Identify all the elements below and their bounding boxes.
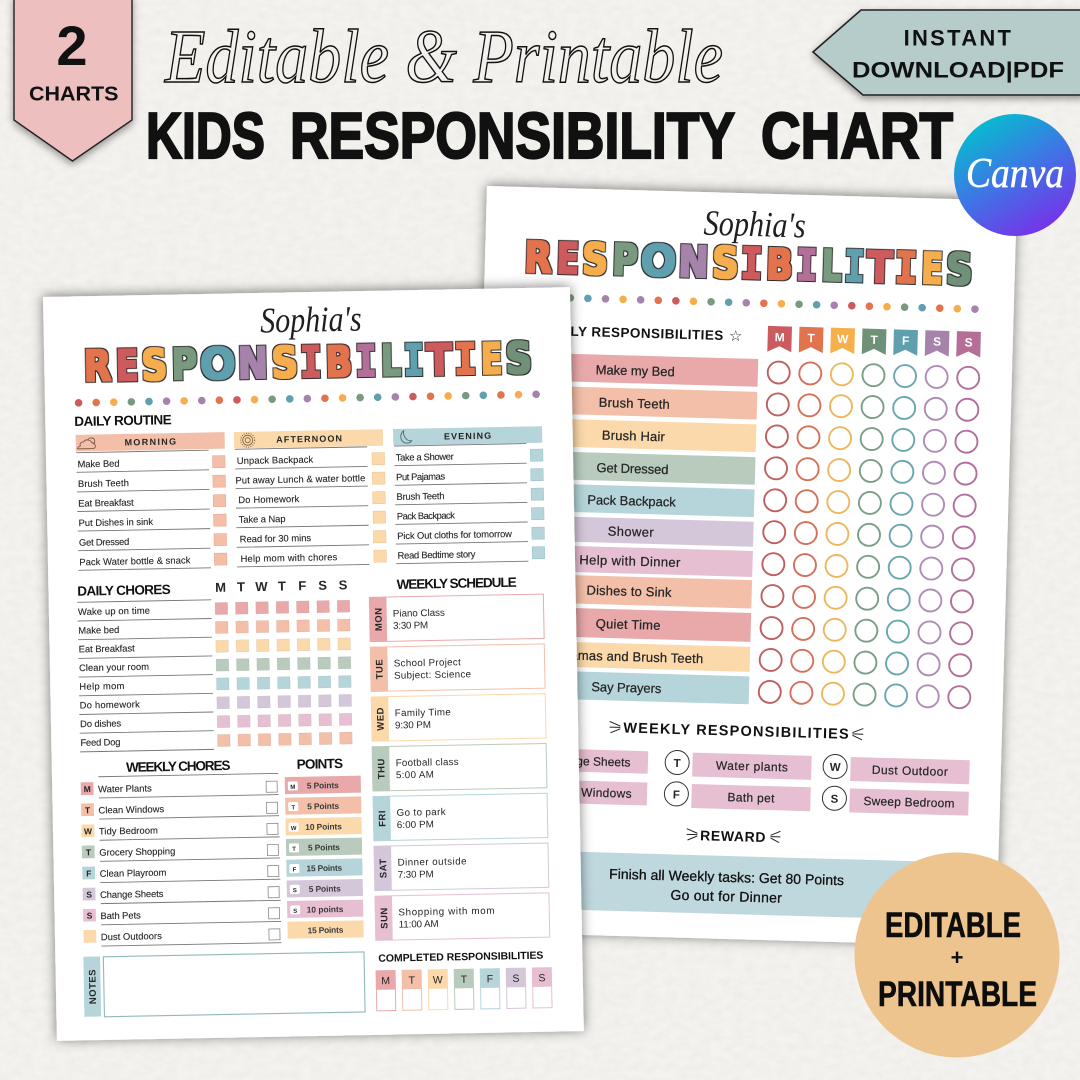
- task bars: Pack Backpack: [587, 492, 677, 510]
- column: morning: Put Dishes in sink: [79, 516, 153, 528]
- column: evening: Pack Backpack: [397, 509, 455, 522]
- weekly chores list: Tidy Bedroom: [99, 824, 158, 837]
- daily chores list: Feed Dog: [80, 736, 121, 748]
- day letters row: T: [237, 579, 245, 594]
- points bars: 15 Points: [306, 863, 343, 873]
- daily chores list: Clean your room: [79, 661, 149, 673]
- heading: daily responsibilities: DAILY RESPONSIBILITIES: [546, 323, 724, 343]
- weekly chores list: T: [85, 805, 91, 815]
- day letters row: S: [318, 578, 327, 593]
- heading: completed responsibilities: COMPLETED RESPONSIBILITIES: [378, 950, 544, 965]
- title: Responsibilities: S: [945, 245, 973, 296]
- weekly task tags: T: [673, 758, 681, 770]
- title: Responsibilities: I: [894, 244, 918, 294]
- daily chores list: Make bed: [78, 624, 119, 636]
- badge: editable + printable: EDITABLE: [885, 906, 1021, 945]
- badge: editable + printable: +: [951, 945, 963, 970]
- daily chores list: Wake up on time: [78, 605, 150, 617]
- title: Responsibilities: N: [678, 238, 709, 288]
- reward banner: Go out for Dinner: [670, 887, 782, 906]
- badge: instant download pdf: INSTANT: [904, 26, 1012, 51]
- title: Responsibilities: S: [505, 334, 533, 385]
- weekly schedule: 5:00 AM: [396, 770, 434, 781]
- weekly chores list: Change Sheets: [100, 888, 164, 900]
- points bars: W: [291, 826, 297, 832]
- panel: back chart sheet: [466, 186, 1017, 947]
- reward banner: Finish all Weekly tasks: Get 80 Points: [609, 866, 844, 888]
- day letters row: F: [298, 578, 306, 593]
- name: Sophia's: Sophia's: [703, 203, 806, 246]
- weekly schedule: TUE: [374, 659, 386, 679]
- column: morning: Pack Water bottle & snack: [79, 554, 191, 567]
- day flags: F: [902, 334, 910, 348]
- weekly schedule: Football class: [396, 757, 459, 769]
- reward banner: [507, 850, 968, 921]
- day flags: [767, 326, 981, 358]
- title: Responsibilities: I: [740, 239, 763, 290]
- icon: cloud and sun: [77, 438, 95, 449]
- title: Responsibilities: N: [237, 339, 268, 390]
- title: Responsibilities: I: [403, 336, 424, 386]
- title: Responsibilities: S: [271, 338, 299, 389]
- column: afternoon: AFTERNOON: [276, 433, 342, 445]
- weekly schedule: Subject: Science: [394, 669, 472, 682]
- completed responsibilities boxes: T: [461, 974, 468, 986]
- points bars: M: [290, 785, 295, 791]
- name: Sophia's: Sophia's: [260, 299, 362, 340]
- column: morning: MORNING: [124, 437, 176, 448]
- heading: daily chores: DAILY CHORES: [77, 582, 171, 599]
- title: Responsibilities: T: [426, 336, 453, 386]
- title: Responsibilities: L: [821, 242, 842, 292]
- icon: moon: [401, 431, 412, 443]
- weekly chores list: M: [84, 784, 91, 794]
- task bars: Brush Hair: [602, 428, 666, 444]
- points bars: 5 Points: [307, 780, 339, 791]
- weekly task tags: Clean Windows: [544, 784, 632, 801]
- title: Responsibilities: I: [454, 335, 477, 386]
- daily chores list: Help mom: [79, 680, 125, 692]
- task bars: [513, 352, 758, 704]
- column: afternoon: Unpack Backpack: [237, 454, 314, 466]
- task bars: Brush Teeth: [599, 395, 670, 412]
- weekly schedule: [369, 594, 550, 940]
- title: Responsibilities: [83, 334, 533, 392]
- column: afternoon: Do Homework: [238, 493, 300, 505]
- badge: 2 charts ribbon: 2: [56, 14, 88, 77]
- completed responsibilities boxes: S: [538, 972, 546, 984]
- heading: reward: [687, 827, 780, 845]
- weekly schedule: SUN: [379, 907, 390, 929]
- badge: editable + printable: [854, 852, 1060, 1058]
- title: Responsibilities: S: [581, 235, 609, 286]
- title: Responsibilities: R: [524, 233, 553, 284]
- dotted garland: [75, 390, 540, 407]
- weekly chores list: Clean Windows: [98, 803, 165, 815]
- completed responsibilities boxes: T: [408, 975, 416, 987]
- panel: front chart sheet: [43, 287, 584, 1041]
- title: Responsibilities: I: [300, 338, 322, 388]
- points bars: 10 Points: [305, 821, 342, 832]
- column: morning: Brush Teeth: [78, 477, 129, 489]
- weekly task tags: Change Sheets: [547, 753, 631, 770]
- completed responsibilities boxes: S: [512, 973, 520, 985]
- task bars: Shower: [608, 524, 655, 540]
- day letters row: S: [339, 577, 348, 593]
- column: evening: EVENING: [444, 431, 491, 442]
- day flags: S: [964, 335, 973, 350]
- weekly schedule: MON: [373, 607, 385, 631]
- column: morning: Make Bed: [77, 458, 120, 469]
- title: Responsibilities: E: [115, 341, 139, 392]
- weekly task tags: W: [829, 762, 841, 774]
- column: morning: [76, 432, 227, 570]
- weekly schedule: 3:30 PM: [393, 620, 428, 632]
- notes box: NOTES: [87, 969, 99, 1004]
- task bars: Make my Bed: [596, 362, 675, 379]
- column: afternoon: Help mom with chores: [240, 551, 338, 564]
- daily chores list: Eat Breakfast: [79, 642, 135, 654]
- dotted garland: [514, 292, 979, 313]
- points bars: 5 Points: [308, 842, 340, 853]
- title: Responsibilities: T: [866, 243, 894, 294]
- day flags: M: [774, 330, 785, 344]
- badge: editable + printable: PRINTABLE: [878, 975, 1037, 1014]
- column: evening: Take a Shower: [396, 451, 454, 463]
- title: Responsibilities: I: [355, 337, 377, 387]
- weekly schedule: SAT: [378, 858, 390, 878]
- title: Responsibilities: E: [556, 234, 580, 285]
- weekly task tags: S: [830, 794, 839, 806]
- weekly schedule: THU: [376, 758, 388, 779]
- points bars: [285, 776, 364, 939]
- points bars: 5 Points: [307, 801, 340, 811]
- title: Kids Responsibility Chart: KIDS: [146, 99, 265, 172]
- weekly schedule: Go to park: [397, 807, 446, 819]
- title: Responsibilities: O: [200, 340, 236, 390]
- title: Responsibilities: L: [381, 337, 401, 387]
- title: Responsibilities: B: [766, 240, 793, 291]
- column: afternoon: [234, 429, 386, 567]
- column: morning: Get Dressed: [79, 536, 129, 548]
- daily chores list: [77, 600, 214, 752]
- title: Responsibilities: E: [921, 244, 943, 295]
- icon: sun: [241, 433, 255, 447]
- tracking circles grid: [758, 361, 980, 708]
- heading: weekly chores: WEEKLY CHORES: [126, 758, 231, 775]
- notes box: [83, 952, 365, 1017]
- completed responsibilities boxes: [376, 968, 552, 1011]
- task bars: Say Prayers: [591, 679, 662, 696]
- points bars: T: [292, 847, 296, 853]
- weekly task tags: Sweep Bedroom: [863, 794, 955, 810]
- day flags: S: [933, 335, 941, 349]
- title: Responsibilities: P: [612, 236, 638, 286]
- weekly chores list: S: [87, 911, 93, 921]
- title: Responsibilities: S: [712, 239, 739, 289]
- day letters row: M: [215, 580, 226, 595]
- heading: reward: REWARD: [700, 827, 766, 845]
- weekly chores list: Grocery Shopping: [99, 845, 175, 858]
- title: Responsibilities: E: [480, 335, 503, 385]
- heading: weekly schedule: WEEKLY SCHEDULE: [396, 575, 517, 592]
- title: Responsibilities: B: [325, 337, 353, 388]
- weekly task tags: [528, 746, 970, 816]
- column: afternoon: Put away Lunch & water bottle: [235, 472, 365, 486]
- weekly task tags: F: [673, 789, 680, 802]
- points bars: S: [293, 888, 297, 894]
- task bars: Quiet Time: [596, 616, 661, 633]
- column: afternoon: Take a Nap: [239, 513, 286, 525]
- completed responsibilities boxes: M: [381, 975, 390, 987]
- weekly chores list: [81, 773, 281, 946]
- title: Kids Responsibility Chart: RESPONSIBILITY: [290, 99, 735, 172]
- column: evening: Pick Out cloths for tomorrow: [397, 528, 512, 541]
- completed responsibilities boxes: W: [433, 974, 443, 986]
- weekly schedule: FRI: [377, 810, 389, 827]
- title: Responsibilities: P: [171, 340, 197, 391]
- daily chores list: Do dishes: [80, 717, 121, 729]
- title: Responsibilities: [524, 233, 973, 296]
- day flags: T: [870, 333, 879, 347]
- points bars: 15 Points: [308, 925, 344, 935]
- heading: weekly responsibilities: WEEKLY RESPONSIBILITIES: [623, 721, 850, 743]
- weekly schedule: Piano Class: [393, 608, 445, 620]
- weekly task tags: Bath pet: [727, 790, 775, 805]
- title: Responsibilities: I: [796, 241, 818, 291]
- title: Responsibilities: R: [83, 342, 112, 392]
- weekly schedule: 7:30 PM: [398, 869, 434, 881]
- badge: 2 charts ribbon: [14, 0, 132, 161]
- weekly chores list: T: [86, 847, 92, 857]
- points bars: 5 Points: [309, 883, 341, 894]
- task bars: Dishes to Sink: [586, 583, 672, 600]
- weekly task tags: Water plants: [716, 758, 788, 774]
- column: evening: Put Pajamas: [396, 470, 446, 482]
- badge: instant download pdf: [813, 10, 1080, 95]
- weekly chores list: Clean Playroom: [100, 867, 167, 879]
- heading: points: POINTS: [297, 756, 344, 772]
- column: afternoon: Read for 30 mins: [240, 532, 311, 544]
- task bars: Get Dressed: [596, 460, 669, 477]
- weekly schedule: Dinner outside: [397, 856, 467, 869]
- task bars: Help with Dinner: [579, 552, 681, 570]
- weekly schedule: 9:30 PM: [395, 720, 431, 732]
- points bars: S: [293, 909, 297, 915]
- weekly schedule: Family Time: [395, 707, 451, 719]
- weekly chores list: Bath Pets: [100, 909, 141, 921]
- weekly chores list: Water Plants: [98, 782, 152, 794]
- day letters row: [215, 577, 348, 595]
- badge: Canva logo: [954, 114, 1076, 236]
- heading: daily routine: DAILY ROUTINE: [74, 412, 172, 429]
- column: evening: [393, 426, 545, 564]
- badge: Canva logo: Canva: [966, 151, 1064, 197]
- badge: 2 charts ribbon: CHARTS: [29, 83, 118, 106]
- column: evening: Read Bedtime story: [397, 548, 476, 561]
- task bars: Pajamas and Brush Teeth: [551, 647, 703, 666]
- title: Kids Responsibility Chart: CHART: [761, 99, 953, 172]
- weekly chores list: S: [86, 889, 92, 900]
- title: Responsibilities: O: [640, 237, 677, 288]
- weekly schedule: 11:00 AM: [399, 919, 439, 931]
- day letters row: T: [278, 579, 286, 594]
- column: morning: Eat Breakfast: [78, 497, 134, 509]
- title: Responsibilities: S: [141, 341, 168, 391]
- points bars: 10 points: [307, 904, 344, 915]
- points bars: T: [291, 805, 296, 812]
- weekly schedule: WED: [375, 707, 387, 731]
- points bars: F: [293, 867, 297, 874]
- weekly schedule: School Project: [394, 657, 461, 670]
- weekly chores list: Dust Outdoors: [101, 930, 162, 942]
- column: evening: Brush Teeth: [396, 490, 445, 502]
- weekly schedule: 6:00 PM: [397, 819, 434, 831]
- weekly chores list: F: [86, 868, 91, 878]
- completed responsibilities boxes: F: [487, 973, 493, 985]
- badge: instant download pdf: DOWNLOAD|PDF: [852, 57, 1064, 82]
- weekly task tags: Dust Outdoor: [872, 763, 948, 779]
- title: Responsibilities: I: [844, 242, 865, 293]
- day flags: W: [837, 332, 849, 346]
- daily chores checkbox grid: [215, 600, 352, 747]
- title: Kids Responsibility Chart: [146, 99, 953, 172]
- weekly schedule: Shopping with mom: [398, 906, 495, 918]
- heading: daily responsibilities: ☆: [729, 327, 743, 345]
- day letters row: W: [255, 579, 268, 594]
- weekly chores list: W: [84, 826, 93, 836]
- day flags: T: [807, 331, 816, 345]
- daily chores list: Do homework: [80, 698, 140, 710]
- title: Editable & Printable: Editable & Printable: [164, 15, 723, 99]
